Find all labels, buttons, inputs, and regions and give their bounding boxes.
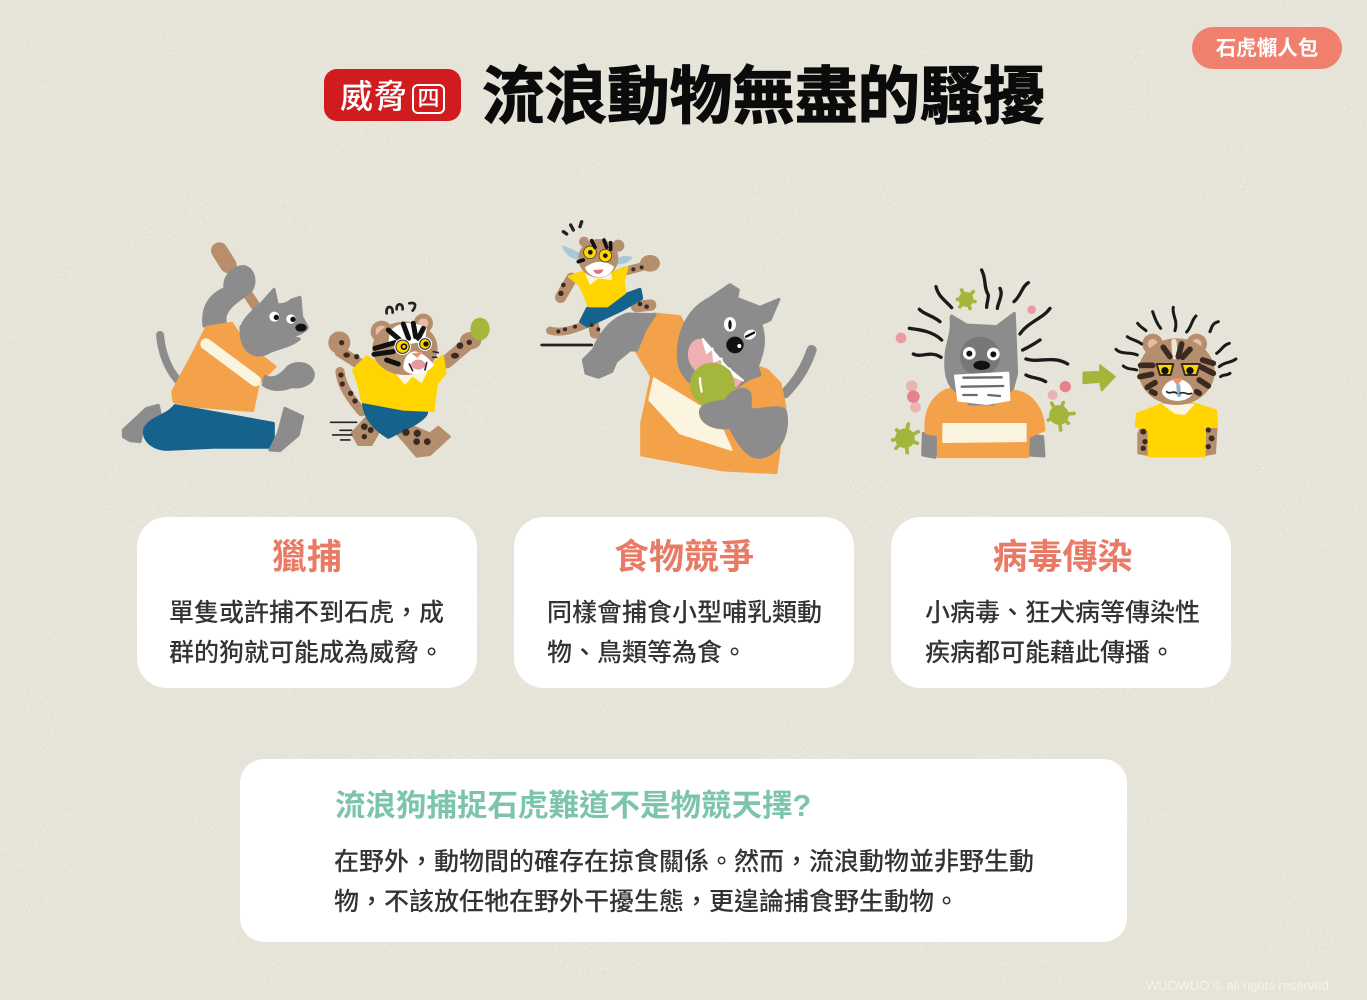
leopard cat running away — [542, 222, 660, 345]
heading: food competition: 食物競爭 — [614, 538, 754, 577]
badge: threat four: 四 — [417, 86, 440, 111]
text: natural selection answer: 物，不該放任牠在野外干擾生態，更遑論捕食野生動物。 — [334, 888, 959, 916]
badge: threat four: 威脅 — [340, 78, 408, 115]
panel: virus transmission — [891, 517, 1231, 688]
arrow — [1083, 365, 1115, 391]
text: virus transmission description — [925, 599, 1200, 667]
panel: hunting — [137, 517, 477, 688]
leopard cat fleeing with a ball — [328, 303, 490, 457]
heading: natural selection question: 流浪狗捕捉石虎難道不是物競天擇? — [335, 789, 811, 823]
panel: food competition — [514, 517, 854, 688]
wolf running with a club — [123, 251, 313, 451]
text: virus transmission description: 小病毒、狂犬病等傳染性 — [925, 599, 1200, 627]
text: natural selection answer: 在野外，動物間的確存在掠食關係。然而，流浪動物並非野生動 — [334, 848, 1034, 876]
heading: hunting: 獵捕 — [272, 538, 342, 577]
text: natural selection answer — [334, 848, 1034, 916]
footer: copyright: WUOWUO © all rights reserved. — [1146, 978, 1333, 993]
text: virus transmission description: 疾病都可能藉此傳播。 — [925, 639, 1175, 667]
badge: threat four — [324, 69, 461, 121]
illustration: virus transmission scene — [893, 270, 1236, 457]
illustration: food competition scene — [542, 222, 812, 473]
text: food competition description: 物、鳥類等為食。 — [547, 639, 747, 667]
title: 流浪動物無盡的騷擾 — [482, 62, 1045, 132]
text: food competition description: 同樣會捕食小型哺乳類動 — [547, 599, 822, 627]
text: hunting description: 群的狗就可能成為威脅。 — [169, 639, 444, 667]
text: food competition description — [547, 599, 822, 667]
text: hunting description: 單隻或許捕不到石虎，成 — [169, 599, 444, 627]
text: hunting description — [169, 599, 444, 667]
panel: natural selection note — [240, 759, 1127, 942]
heading: virus transmission: 病毒傳染 — [992, 538, 1132, 577]
wolf biting the ball — [583, 285, 812, 473]
tag: series label — [1192, 27, 1342, 69]
illustration: hunting scene — [123, 251, 490, 457]
sick wolf wearing a mask — [893, 270, 1074, 457]
tag: series label: 石虎懶人包 — [1216, 37, 1318, 60]
sick leopard cat — [1116, 307, 1236, 456]
